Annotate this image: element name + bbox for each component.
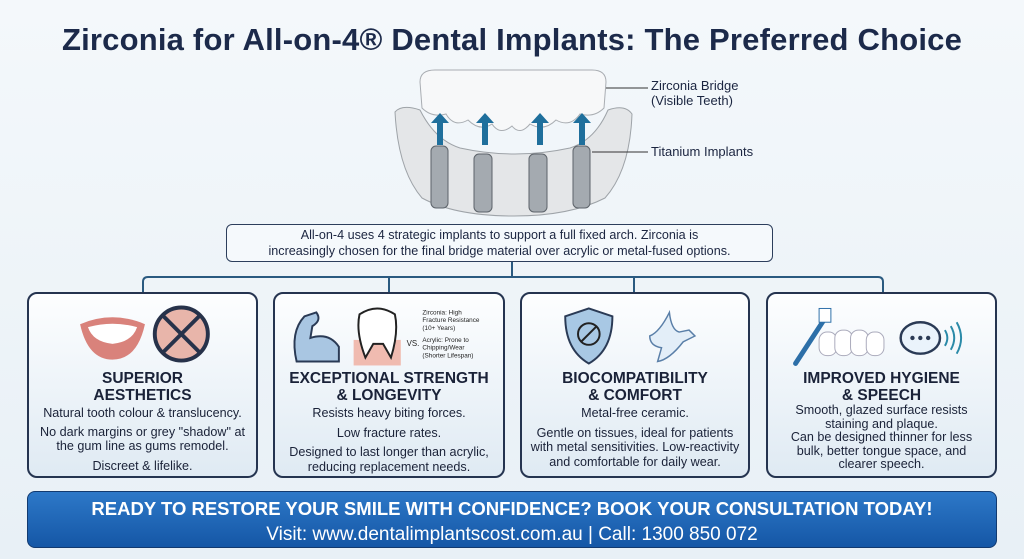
arrows bbox=[431, 113, 591, 145]
icons: smile and crossed bbox=[80, 306, 210, 362]
panel: hygiene: IMPROVED HYGIENE bbox=[803, 370, 960, 387]
panel: aesthetics: Natural tooth colour & translucency. bbox=[43, 406, 242, 420]
panel: strength: Designed to last longer than acrylic, reducing replacement needs. bbox=[289, 445, 489, 474]
panel: hygiene: Smooth, glazed surface resists staining and plaque. bbox=[795, 403, 968, 431]
panel: aesthetics: SUPERIOR bbox=[102, 370, 183, 387]
label: zirconia bridge bbox=[651, 78, 738, 108]
icons: arm, tooth, comparison: Zirconia: High bbox=[422, 309, 462, 316]
panel: strength: Resists heavy biting forces. bbox=[312, 406, 466, 420]
diagram: jaw with implants bbox=[394, 70, 648, 216]
panel: aesthetics: AESTHETICS bbox=[93, 387, 192, 404]
label: zirconia bridge: (Visible Teeth) bbox=[651, 93, 733, 108]
info box: increasingly chosen for the final bridge material over acrylic or metal-fused options. bbox=[268, 244, 730, 258]
info box: All-on-4 uses 4 strategic implants to support a full fixed arch. Zirconia is bbox=[301, 228, 698, 242]
panel: hygiene: & SPEECH bbox=[842, 387, 921, 404]
panel: biocompatibility: BIOCOMPATIBILITY bbox=[562, 370, 708, 387]
label lines bbox=[592, 88, 648, 152]
panel: biocompatibility bbox=[520, 292, 750, 478]
panel: biocompatibility: Metal-free ceramic. bbox=[581, 406, 689, 420]
icons: arm, tooth, comparison: Chipping/Wear bbox=[422, 345, 465, 352]
info box bbox=[226, 224, 773, 262]
bridge teeth bbox=[420, 70, 606, 131]
banner: call to action: Visit: www.dentalimplantscost.com.au | Call: 1300 850 072 bbox=[266, 524, 758, 545]
panel: strength: Low fracture rates. bbox=[337, 426, 441, 440]
icons: arm, tooth, comparison: VS. bbox=[407, 339, 419, 348]
panel: strength bbox=[273, 292, 505, 478]
panel: strength: EXCEPTIONAL STRENGTH bbox=[289, 370, 489, 387]
implants bbox=[431, 146, 590, 212]
icons: arm, tooth, comparison bbox=[294, 308, 480, 366]
jaw bbox=[395, 107, 632, 216]
banner: call to action bbox=[27, 491, 997, 548]
connectors bbox=[142, 262, 884, 292]
icons: arm, tooth, comparison: Fracture Resistance bbox=[422, 317, 480, 324]
label: titanium implants: Titanium Implants bbox=[651, 144, 753, 159]
icons: arm, tooth, comparison: Acrylic: Prone to bbox=[422, 337, 469, 344]
panel: hygiene: Can be designed thinner for less bulk, better tongue space, and clearer speech. bbox=[791, 430, 972, 471]
banner: call to action: READY TO RESTORE YOUR SMILE WITH CONFIDENCE? BOOK YOUR CONSULTATION TODAY! bbox=[91, 498, 933, 519]
icons: shield and dove bbox=[564, 307, 696, 365]
panel: biocompatibility: & COMFORT bbox=[588, 387, 682, 404]
icons: arm, tooth, comparison: (10+ Years) bbox=[422, 325, 455, 332]
title: Zirconia for All-on-4® Dental Implants: The Preferred Choice bbox=[62, 22, 962, 57]
panel: aesthetics bbox=[27, 292, 258, 478]
panel: aesthetics: Discreet & lifelike. bbox=[92, 458, 193, 472]
panel: strength: & LONGEVITY bbox=[336, 387, 442, 404]
panel: biocompatibility: Gentle on tissues, ideal for patients with metal sensitivities. Low-reactivity and comfortable for daily wear. bbox=[531, 426, 739, 468]
icons: toothbrush, teeth, speech bbox=[793, 308, 962, 366]
panel: hygiene bbox=[766, 292, 997, 478]
panel: aesthetics: No dark margins or grey "shadow" at the gum line as gums remodel. bbox=[40, 424, 245, 453]
label: zirconia bridge: Zirconia Bridge bbox=[651, 78, 738, 93]
icons: arm, tooth, comparison: (Shorter Lifespan) bbox=[422, 353, 473, 360]
